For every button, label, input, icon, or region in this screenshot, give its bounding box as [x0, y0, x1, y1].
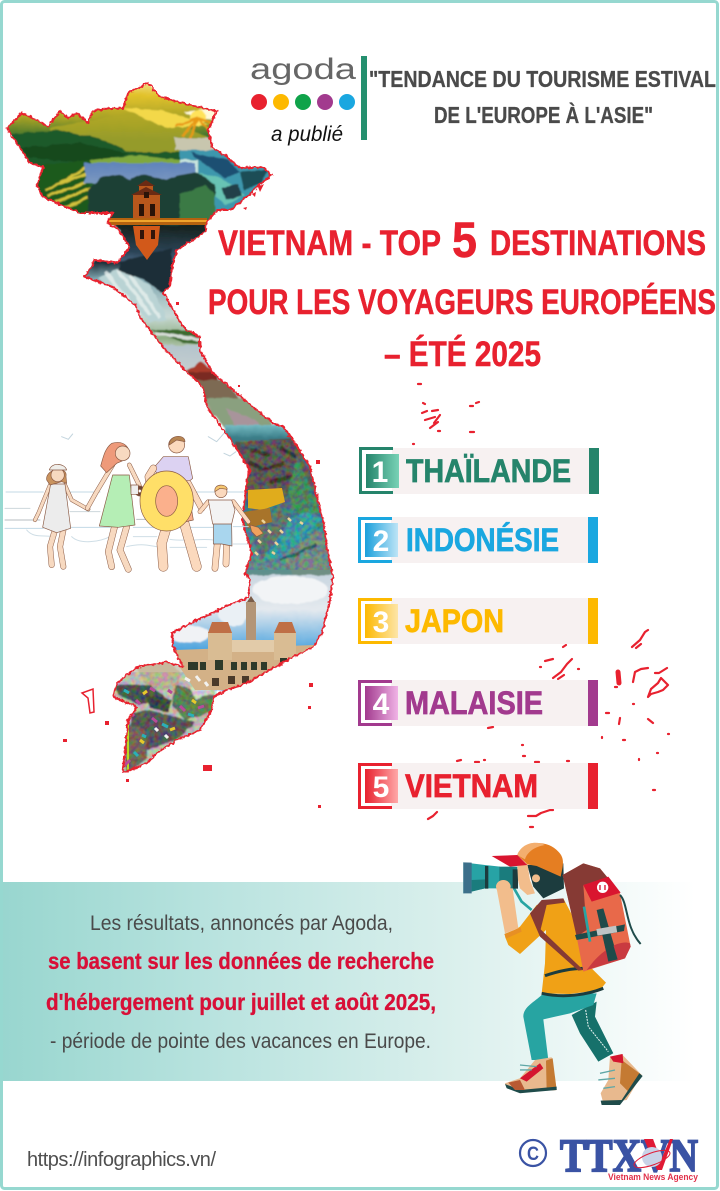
girl [35, 464, 88, 567]
rank 2: Indonésie [360, 517, 598, 563]
scene: Hue citadel [162, 344, 273, 428]
Hoi An yellow house and crowd [244, 488, 303, 555]
rank 2: Indonésie: INDONÉSIE [406, 522, 559, 558]
head [527, 863, 564, 898]
rank 4: Malaisie: MALAISIE [405, 685, 543, 721]
cap [492, 843, 563, 877]
info text: se basent sur les données de recherche [48, 948, 434, 974]
scene: Mekong base [110, 660, 215, 777]
report title: DE L'EUROPE À L'ASIE" [434, 101, 653, 128]
rank 3: Japon: 3 [373, 606, 389, 639]
map of Vietnam with photo scenes [0, 76, 669, 827]
rank 5: Vietnam: 5 [373, 771, 389, 804]
son [200, 485, 263, 568]
rank 5: Vietnam: VIETNAM [405, 768, 538, 804]
coast islands [63, 184, 321, 808]
scene: waterfall and river [86, 261, 200, 347]
front leg [523, 993, 597, 1060]
rank 4: Malaisie: 4 [373, 688, 390, 721]
main title [208, 212, 716, 374]
camera strap [514, 888, 532, 910]
back leg [572, 1002, 613, 1062]
birds [62, 433, 236, 456]
report title [369, 66, 716, 128]
rank 5: Vietnam [360, 763, 598, 809]
scene: Saigon sky [165, 575, 340, 690]
rank 1: Thaïlande [360, 448, 599, 494]
website url: https://infographics.vn/ [27, 1149, 216, 1171]
info text: Les résultats, annoncés par Agoda, [90, 912, 393, 935]
rank 1: Thaïlande: THAÏLANDE [406, 453, 571, 489]
a publié label: a publié [271, 123, 343, 146]
main title: VIETNAM - TOP [218, 224, 441, 263]
agoda logo [250, 53, 356, 146]
logo wordmark: agoda [250, 53, 356, 86]
torso [505, 898, 606, 994]
info band [0, 882, 717, 1081]
rank 3: Japon: JAPON [405, 603, 504, 639]
texture: Hoi An crowd and Mekong boats [112, 440, 330, 774]
info text: d'hébergement pour juillet et août 2025, [46, 989, 436, 1015]
rank 1: Thaïlande: 1 [372, 456, 388, 489]
scene: Ha Long bay [178, 148, 269, 212]
Saigon city hall [175, 596, 315, 690]
divider bar [361, 56, 367, 140]
Paracel and Spratly islands [413, 384, 669, 827]
ranking list [360, 448, 599, 809]
scene: Hoi An aerial [225, 425, 340, 585]
illustration: photographer [463, 843, 643, 1105]
boots [505, 1054, 643, 1105]
camera [463, 862, 518, 893]
TTXVN logo: Vietnam News Agency [608, 1172, 698, 1182]
copyright mark [520, 1140, 546, 1166]
rank 3: Japon [360, 598, 598, 644]
illustration: family on the beach [5, 433, 263, 569]
main title: 5 [452, 212, 477, 268]
main title: – ÉTÉ 2025 [384, 334, 541, 374]
beach lines [5, 492, 248, 547]
rank 2: Indonésie: 2 [373, 525, 389, 558]
scene: northern mountains [8, 84, 216, 213]
scene: Hanoi lake [82, 160, 217, 264]
info text [46, 912, 436, 1053]
hand [496, 880, 511, 893]
mother [87, 442, 145, 569]
map outline [7, 83, 333, 773]
logo dots [251, 94, 355, 110]
TTXVN logo: TTXVN [560, 1130, 698, 1182]
info text: - période de pointe des vacances en Europe. [50, 1030, 431, 1053]
backpack [563, 863, 641, 972]
Mekong market boats and people [124, 676, 208, 772]
father [140, 436, 202, 567]
copyright mark: C [527, 1144, 539, 1165]
icon: Turtle Tower [107, 180, 207, 260]
rank 4: Malaisie [360, 680, 598, 726]
shoulder strap [530, 898, 583, 971]
arm [496, 882, 518, 933]
